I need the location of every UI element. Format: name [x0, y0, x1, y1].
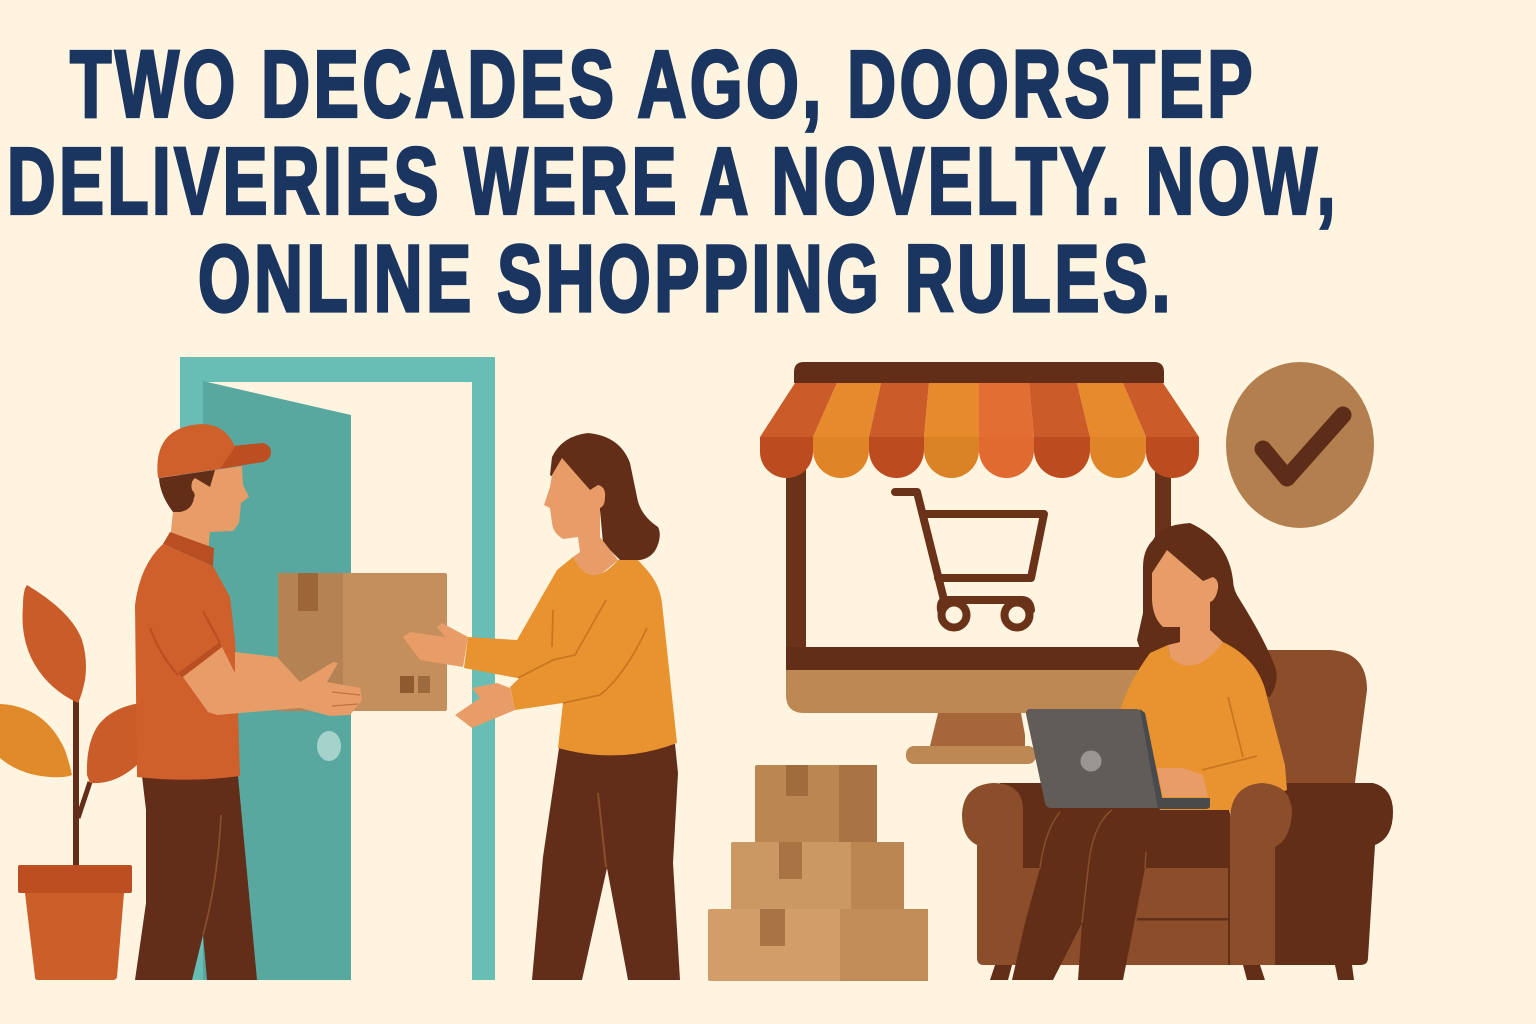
- laptop base: [1158, 798, 1210, 809]
- seated woman trousers: [1012, 810, 1229, 980]
- shop monitor: [786, 440, 1171, 764]
- woman lower hand: [455, 683, 515, 728]
- chair inner: [1000, 783, 1230, 868]
- chair legs: [990, 965, 1354, 980]
- woman trousers: [532, 744, 680, 980]
- woman sweater: [464, 557, 677, 755]
- woman upper hand: [403, 623, 468, 667]
- chair right outer arm: [1263, 783, 1393, 965]
- seated woman sweater: [1120, 642, 1287, 813]
- man collar: [163, 532, 214, 566]
- title: [7, 32, 1339, 332]
- man shirt: [135, 544, 240, 780]
- seated woman: [1012, 523, 1292, 980]
- laptop screen: [1026, 709, 1158, 808]
- chair back: [1255, 650, 1367, 790]
- man arm and hand: [183, 647, 362, 716]
- customer at door: [403, 433, 680, 980]
- man head and neck: [165, 466, 249, 552]
- man trousers: [135, 776, 257, 980]
- chair left arm: [962, 783, 1023, 965]
- seated woman face and neck: [1152, 550, 1223, 666]
- parcel being handed over: [278, 573, 447, 711]
- title: ONLINE SHOPPING RULES.: [198, 226, 1174, 332]
- man cap: [157, 424, 235, 478]
- woman hair: [550, 433, 660, 560]
- stack of parcels: [708, 765, 928, 981]
- potted plant: [0, 585, 140, 980]
- door with teal frame: [180, 357, 495, 980]
- seated woman hair: [1137, 523, 1277, 697]
- armchair: [962, 650, 1393, 980]
- man hair: [159, 470, 215, 512]
- woman face and neck: [544, 458, 618, 580]
- seated woman hand: [1157, 768, 1208, 797]
- icon: shopping cart: [895, 492, 1044, 628]
- icon: check mark badge: [1226, 362, 1374, 528]
- chair right arm front: [1230, 783, 1292, 965]
- delivery man: [135, 424, 271, 980]
- man cap brim: [220, 443, 271, 469]
- shop awning: [760, 362, 1199, 478]
